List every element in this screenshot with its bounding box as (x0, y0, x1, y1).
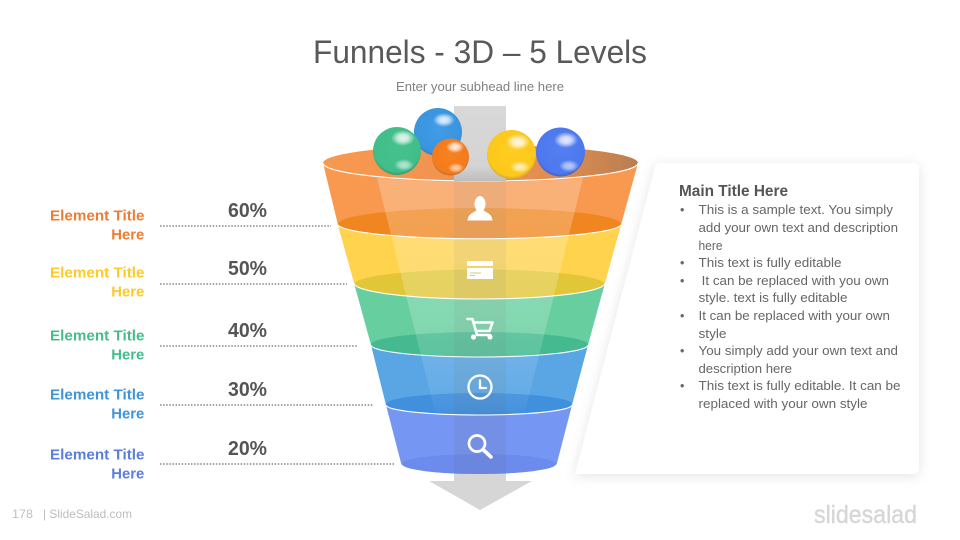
panel bullet list (680, 203, 901, 411)
value: 60% (228, 200, 267, 222)
value: 40% (228, 320, 267, 342)
value: 20% (228, 438, 267, 460)
level 2 overlap (338, 225, 621, 251)
balls (373, 108, 585, 179)
ball: orange (432, 138, 469, 176)
label: Element Title (50, 328, 144, 344)
level 1 body (323, 163, 638, 240)
panel bullet list: description here (698, 362, 792, 376)
icon: clock (468, 376, 492, 398)
label (50, 386, 144, 422)
footer: page number: 178 (12, 507, 33, 521)
panel bullet list: here (698, 239, 723, 253)
label: Here (111, 226, 144, 244)
light beam through funnel (377, 178, 583, 416)
icon: cart (468, 319, 492, 338)
level 5 body (386, 405, 572, 474)
label (50, 446, 144, 482)
label (50, 328, 144, 364)
panel bullet list: • (680, 309, 684, 323)
row: 20% (50, 438, 394, 482)
level 5 inner ellipse (402, 454, 556, 474)
panel bullet list: style. text is fully editable (698, 291, 848, 305)
subhead: Enter your subhead line here (396, 79, 564, 94)
label (50, 208, 144, 244)
arrow shaft seen through funnel (454, 181, 506, 474)
value: 50% (228, 258, 267, 280)
panel bullet list: You simply add your own text and (698, 344, 898, 358)
ball: green (373, 127, 421, 175)
level 2 body (338, 225, 621, 300)
label: Element Title (50, 446, 144, 464)
arrow head below funnel (429, 470, 532, 510)
panel bullet list: • (680, 379, 684, 393)
leader line (160, 283, 347, 285)
level 4 inner ellipse (386, 393, 572, 415)
leader line (160, 463, 394, 465)
panel bullet list: • (680, 344, 684, 358)
ball: blue (414, 108, 462, 156)
label: Here (111, 346, 144, 364)
panel bullet list: This is a sample text. You simply (698, 203, 894, 217)
level 1 inner ellipse (338, 208, 621, 240)
panel bullet list: • (680, 274, 684, 288)
row: 30% (50, 379, 374, 422)
level 4 body (371, 345, 588, 416)
panel: description card (575, 163, 919, 474)
leader line (160, 225, 331, 227)
label: Element Title (50, 264, 144, 282)
panel bullet list: • (680, 256, 684, 270)
level 3 overlap (354, 283, 605, 309)
panel bullet list: style (698, 327, 727, 341)
level divider highlights (323, 163, 638, 415)
footer: site name: | SlideSalad.com (43, 507, 132, 521)
footer: logo: slidesalad (814, 501, 917, 529)
label (50, 264, 144, 300)
row: 50% (50, 258, 347, 300)
ball: yellow (487, 130, 536, 179)
panel heading: Main Title Here (679, 183, 788, 200)
title: Funnels - 3D – 5 Levels (313, 34, 647, 70)
panel bullet list: This text is fully editable. It can be (698, 379, 901, 393)
icon: card (467, 261, 493, 279)
level 4 overlap (371, 345, 588, 368)
label: Element Title (50, 386, 144, 404)
icon: person (468, 196, 492, 220)
funnel rim: top opening (323, 145, 638, 181)
level 3 body (354, 283, 605, 357)
arrow shaft above funnel (454, 106, 506, 181)
panel bullet list: add your own text and description (698, 221, 898, 235)
label: Element Title (50, 208, 144, 224)
label: Here (111, 466, 144, 482)
panel bullet list: replaced with your own style (698, 397, 868, 411)
level 5 overlap (386, 405, 572, 428)
level 3 inner ellipse (371, 332, 588, 357)
panel bullet list: This text is fully editable (698, 256, 842, 270)
row: 60% (50, 200, 331, 244)
level 2 inner ellipse (354, 270, 605, 300)
label: Here (111, 284, 144, 300)
label: Here (111, 406, 144, 422)
ball: indigo (536, 128, 585, 176)
panel bullet list: It can be replaced with your own (698, 309, 890, 323)
funnel (323, 145, 638, 474)
value: 30% (228, 379, 267, 401)
row: 40% (50, 320, 358, 364)
panel bullet list: • (680, 203, 684, 217)
leader line (160, 404, 374, 406)
panel bullet list: It can be replaced with you own (702, 274, 889, 288)
icon: magnifier (469, 436, 491, 457)
leader line (160, 345, 358, 347)
